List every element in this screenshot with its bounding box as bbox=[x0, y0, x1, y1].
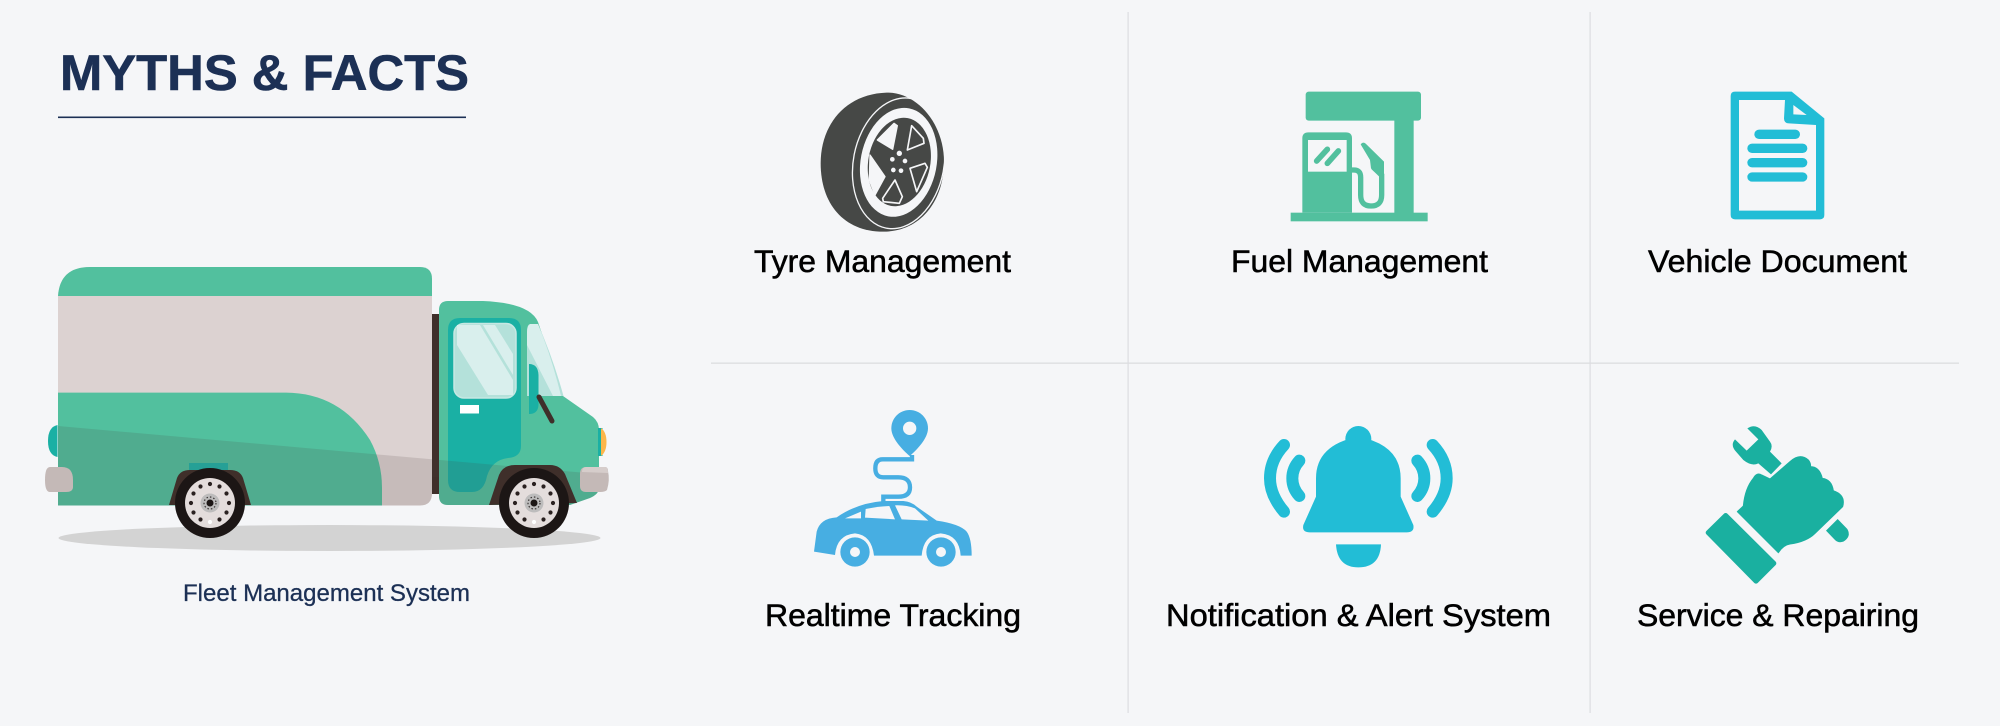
panel: service and repairing bbox=[1637, 426, 1919, 633]
icon: ringing bell bbox=[1270, 426, 1447, 567]
panel: vehicle document bbox=[1648, 92, 1907, 279]
title: MYTHS & FACTS bbox=[60, 45, 469, 101]
panel: fuel management bbox=[1231, 92, 1488, 279]
icon: hand holding wrench bbox=[1708, 426, 1849, 581]
label: Service & Repairing bbox=[1637, 597, 1919, 633]
label: Notification & Alert System bbox=[1166, 597, 1551, 633]
icon: document bbox=[1731, 92, 1824, 219]
door bbox=[448, 318, 521, 492]
icon: tyre bbox=[821, 90, 956, 237]
headlight bbox=[598, 428, 602, 456]
rear bumper bbox=[45, 467, 73, 492]
rear wheel bbox=[175, 468, 245, 538]
label: Tyre Management bbox=[754, 243, 1011, 279]
mirror bbox=[529, 364, 538, 414]
front mudguard bbox=[489, 465, 577, 505]
front bumper bbox=[580, 467, 609, 492]
front wheel bbox=[499, 468, 569, 538]
wiper bbox=[539, 397, 552, 421]
caption: Fleet Management System bbox=[183, 580, 470, 607]
icon: fuel station bbox=[1291, 92, 1428, 221]
cargo box bbox=[58, 267, 432, 506]
cab bbox=[439, 301, 606, 505]
rear mudguard bbox=[189, 463, 228, 471]
windshield bbox=[527, 324, 564, 396]
panel: tyre management bbox=[754, 90, 1011, 279]
rear light bbox=[48, 425, 58, 457]
ground shadow bbox=[58, 525, 600, 551]
label: Fuel Management bbox=[1231, 243, 1488, 279]
label: Vehicle Document bbox=[1648, 243, 1907, 279]
illustration: delivery truck bbox=[45, 267, 609, 551]
icon: car with location pin bbox=[814, 410, 972, 567]
label: Realtime Tracking bbox=[765, 597, 1021, 633]
door window bbox=[454, 324, 516, 398]
door handle bbox=[460, 405, 479, 414]
cab connector bbox=[432, 314, 440, 494]
lower body shade bbox=[58, 426, 609, 510]
panel: realtime tracking bbox=[765, 410, 1021, 633]
panel: notification and alert system bbox=[1166, 426, 1551, 633]
